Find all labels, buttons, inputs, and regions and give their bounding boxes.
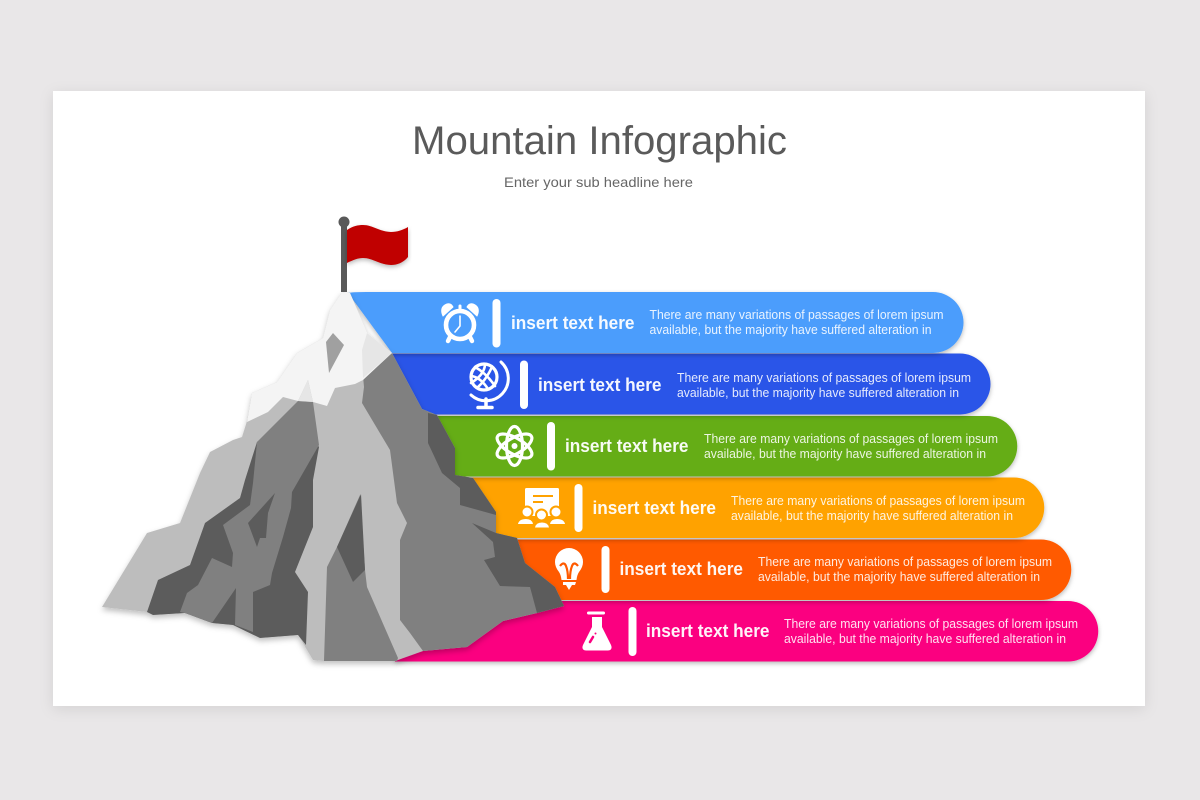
rock in snow [326, 333, 344, 373]
subtitle: Enter your sub headline here [504, 174, 693, 190]
description: There are many variations of passages of lorem ipsum [677, 371, 971, 385]
icon: atom [494, 426, 535, 466]
label: insert text here [592, 498, 716, 518]
icon: presentation audience [518, 488, 565, 528]
divider bar [547, 422, 555, 470]
band 2: royal blue [388, 354, 990, 414]
right rock face [362, 353, 564, 651]
description: There are many variations of passages of lorem ipsum [650, 308, 944, 322]
band 3: green [430, 416, 1017, 476]
flag cloth [347, 225, 408, 265]
icon: globe [471, 362, 508, 408]
title: Mountain Infographic [412, 119, 787, 163]
mountain [102, 292, 564, 661]
panel: white card [53, 91, 1145, 706]
description: There are many variations of passages of lorem ipsum [758, 555, 1052, 569]
snow shaded facet [362, 333, 392, 378]
band 3: green: available, but the majority have suffered alteration in [704, 447, 986, 461]
mountain silhouette [102, 292, 564, 661]
band 6: pink [395, 601, 1098, 662]
divider bar [492, 299, 500, 348]
band 6: pink: available, but the majority have suffered alteration in [784, 632, 1066, 646]
divider bar [520, 360, 528, 409]
band 5: red-orange [505, 540, 1071, 600]
band 5: red-orange: available, but the majority have suffered alteration in [758, 570, 1040, 584]
divider bar [574, 484, 582, 532]
description: There are many variations of passages of lorem ipsum [704, 432, 998, 446]
left shadow facets [147, 420, 319, 645]
snow crease [298, 380, 313, 402]
icon: flask [582, 612, 612, 650]
right shadow facet lower [472, 523, 564, 613]
band 4: orange [470, 478, 1044, 538]
icon: alarm clock [442, 304, 478, 341]
flag [338, 216, 408, 292]
divider bar [602, 546, 610, 593]
description: There are many variations of passages of lorem ipsum [784, 617, 1078, 631]
right shadow facet upper [428, 413, 496, 515]
label: insert text here [511, 313, 634, 333]
band 2: royal blue: available, but the majority have suffered alteration in [677, 386, 959, 400]
inner hollow [248, 493, 275, 547]
icon: light bulb [555, 548, 583, 590]
left rock face [180, 401, 319, 632]
lower centre shadow [337, 494, 365, 582]
label: insert text here [620, 559, 743, 579]
description: There are many variations of passages of lorem ipsum [731, 494, 1025, 508]
label: insert text here [538, 375, 662, 395]
flag pole [341, 224, 347, 292]
label: insert text here [646, 621, 770, 641]
band 1: light blue [348, 292, 963, 353]
snow cap [247, 292, 392, 422]
divider bar [628, 607, 636, 656]
label: insert text here [565, 436, 688, 456]
band 1: light blue: available, but the majority have suffered alteration in [650, 323, 932, 337]
lower centre rock [324, 495, 398, 661]
band 4: orange: available, but the majority have suffered alteration in [731, 509, 1013, 523]
